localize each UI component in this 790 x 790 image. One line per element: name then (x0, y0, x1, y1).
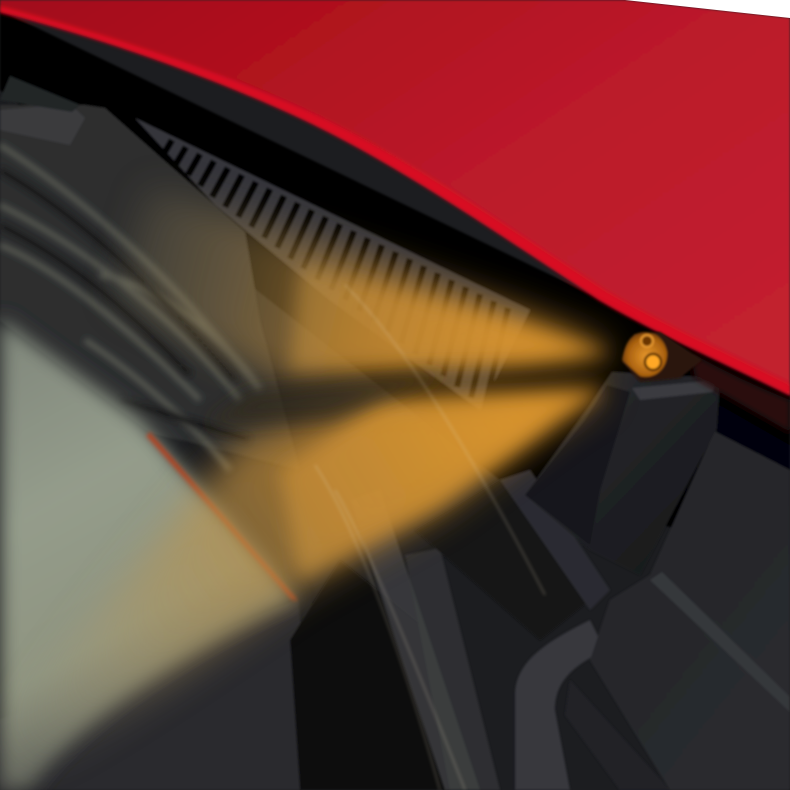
spray beams (0, 185, 618, 770)
dark gap between beams (205, 372, 450, 425)
dark hood lip (690, 352, 790, 432)
nozzle housing (525, 372, 720, 575)
nozzle jet upper (641, 335, 653, 347)
wiper blades blurred (0, 145, 260, 470)
lower dashboard dark area (0, 600, 320, 790)
housing edge (632, 380, 716, 400)
air intake grille (135, 118, 530, 410)
white sky corner (625, 0, 790, 18)
windshield glass (0, 318, 298, 790)
fender edge (716, 405, 790, 470)
red sliver seen through the glass (146, 432, 298, 600)
hood bright edge (0, 6, 790, 395)
lower beam (0, 388, 610, 770)
housing front face (525, 385, 630, 545)
grille slats (165, 140, 508, 406)
glass reflection curve (315, 285, 545, 790)
wiper arm and mechanics, lower middle (290, 470, 670, 790)
red hood (0, 0, 790, 395)
upper beam (110, 185, 618, 385)
icon: orange washer nozzle (622, 332, 702, 382)
dark recess under the hood (0, 10, 790, 560)
cowl panel and wiper arm base (0, 76, 300, 470)
right side cowl panel (590, 430, 790, 790)
panel crease (650, 572, 790, 712)
nozzle jet lower (645, 354, 661, 370)
